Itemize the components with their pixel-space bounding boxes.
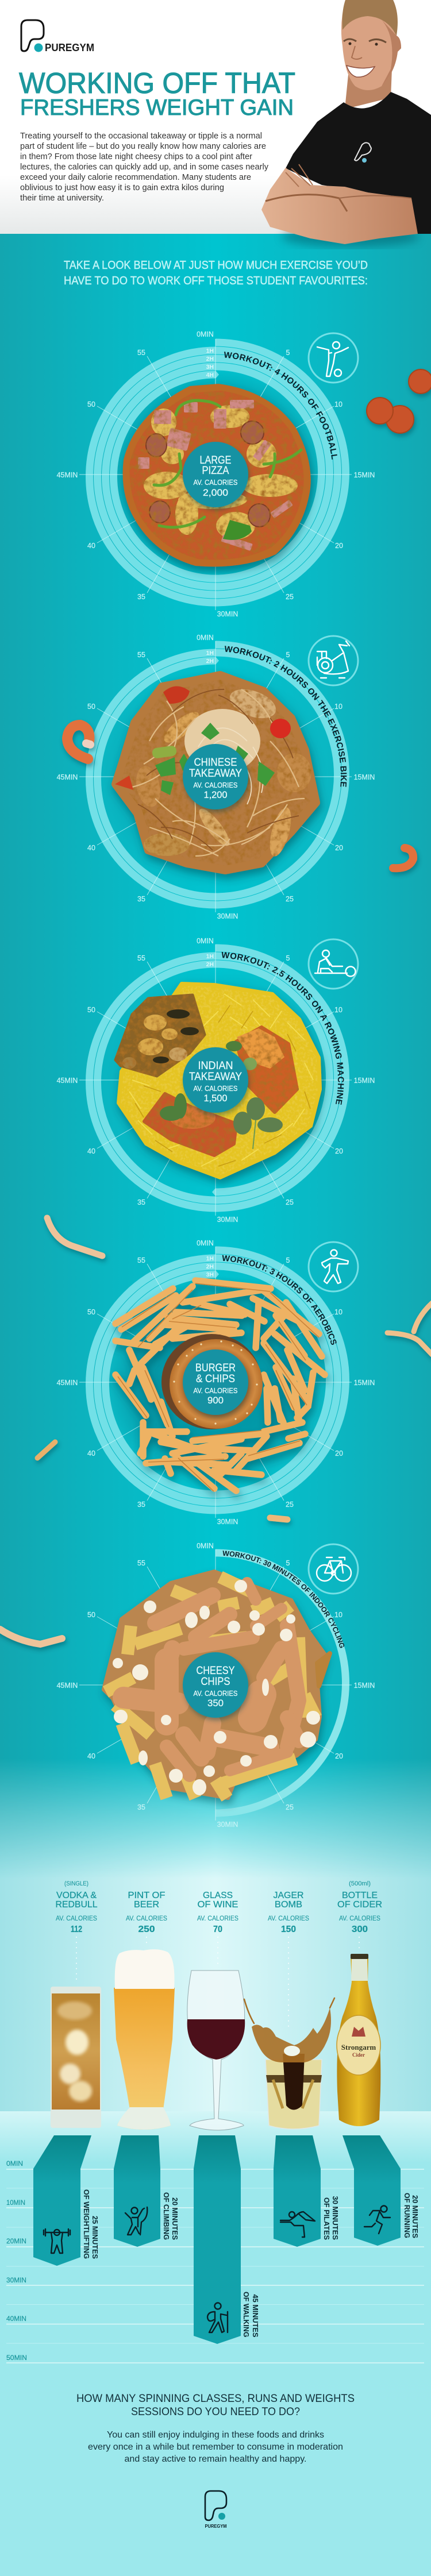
photo: athlete with crossed arms [261,0,431,247]
dial: half hour arc: 50 [87,1611,95,1619]
title: WORKING OFF THAT [19,67,295,99]
dial: half hour arc [57,1542,375,1829]
dial: 2 hours spiral: 10 [334,703,343,711]
drink label: bottle of cider: AV. CALORIES [339,1915,380,1922]
dial: 3 hours spiral: 50 [87,1308,95,1316]
drink label: glass of wine [197,1891,238,1934]
icon: bicycle [309,1544,358,1594]
drink label: vodka and redbull: REDBULL [55,1900,98,1910]
dial: 4 hours spiral: 20 [335,542,343,550]
dial: 2.5 hours spiral: 0MIN [197,937,214,945]
dial: half hour arc: 10 [334,1611,343,1619]
axis labels: 0MIN [6,2159,23,2168]
dial: 3 hours spiral: 15MIN [354,1379,375,1387]
dial: 2.5 hours spiral: 45MIN [57,1077,78,1085]
drink label: jager bomb: JAGER [274,1891,303,1900]
centre badge: cheesy chips: 350 [207,1698,224,1709]
brand logo: PureGym top [21,20,94,53]
dial: half hour arc: 45MIN [57,1682,78,1690]
dial: 3 hours spiral: 10 [334,1308,343,1316]
dial: 2.5 hours spiral: 10 [334,1006,343,1014]
dial: 2 hours spiral: 2H [206,658,214,665]
centre badge: burger and chips [183,1349,248,1415]
intro paragraph [20,132,269,203]
brand logo: PureGym bottom: PUREGYM [205,2524,227,2529]
decoration: stray chips [0,1218,431,1644]
dial: 2 hours spiral: 50 [87,703,95,711]
dial: half hour arc: 25 [286,1803,294,1811]
centre badge: cheesy chips: CHIPS [201,1676,230,1688]
icon: rowing machine [309,939,358,989]
centre badge: chinese takeaway: CHINESE [194,757,237,769]
dial: 2.5 hours spiral: 25 [286,1198,294,1206]
closing heading [76,2393,355,2418]
panel: cheesy chips [56,1542,375,1829]
drink label: vodka and redbull: AV. CALORIES [56,1915,97,1922]
dial: 2.5 hours spiral [57,937,375,1224]
closing paragraph: every once in a while but remember to consume in moderation [88,2442,343,2452]
dial: 2.5 hours spiral: 30MIN [217,1216,238,1224]
intro paragraph: oblivious to just how easy it is to gain extra kilos during [20,183,224,192]
drink: jager bomb [244,1998,334,2129]
icon: exercise bike [309,636,358,685]
dial: half hour arc: 20 [335,1752,343,1760]
subheading [64,259,368,287]
bar: running [343,2135,420,2246]
dial: 3 hours spiral: 0MIN [197,1239,214,1247]
drink label: pint of beer: PINT OF [128,1891,166,1900]
drink label: jager bomb: 150 [281,1925,296,1934]
dial: 2 hours spiral: 20 [335,844,343,852]
food: curry and rice [116,984,320,1178]
dial: 2 hours spiral: 55 [137,651,145,659]
dial: half hour arc: 55 [137,1559,145,1567]
centre badge: chinese takeaway: 1,200 [203,789,228,800]
drink: vodka and redbull glass [51,1987,101,2128]
dial: 3 hours spiral: 30MIN [217,1518,238,1526]
bar: climbing [114,2135,179,2247]
decoration: prawns [67,725,413,868]
centre badge: large pizza: AV. CALORIES [193,479,238,487]
drink label: vodka and redbull [55,1880,98,1934]
dial: half hour arc: 40 [87,1752,95,1760]
centre badge: chinese takeaway: TAKEAWAY [189,768,242,780]
dial: half hour arc: 5 [286,1559,290,1567]
dial: 2.5 hours spiral: 40 [87,1147,95,1155]
drink label: bottle of cider: (500ml) [349,1880,371,1887]
title: FRESHERS WEIGHT GAIN [20,95,294,120]
bar: climbing: OF CLIMBING [162,2192,171,2240]
panel: indian takeaway [56,937,375,1224]
centre badge: large pizza: LARGE [200,454,231,466]
brand logo: PureGym top: PUREGYM [45,42,94,53]
dial: 4 hours spiral: 45MIN [57,471,78,479]
closing paragraph: You can still enjoy indulging in these foods and drinks [107,2430,324,2440]
dial: 4 hours spiral: 35 [137,593,145,601]
centre badge: large pizza: 2,000 [203,487,228,498]
dial: 2.5 hours spiral: 55 [137,954,145,962]
dial: 3 hours spiral: 55 [137,1256,145,1264]
bar: pilates: 30 MINUTES [331,2196,340,2240]
dial: 2.5 hours spiral: 50 [87,1006,95,1014]
drink label: bottle of cider: BOTTLE [342,1891,378,1900]
dial: 3 hours spiral: 1H [206,1255,214,1262]
dial: 3 hours spiral: 2H [206,1263,214,1270]
subheading: TAKE A LOOK BELOW AT JUST HOW MUCH EXERCISE YOU’D [64,259,368,272]
dial: 2 hours spiral: 0MIN [197,634,214,642]
centre badge: cheesy chips: AV. CALORIES [193,1690,238,1698]
drink label: glass of wine: AV. CALORIES [197,1915,238,1922]
dial: 4 hours spiral: 40 [87,542,95,550]
drink: bottle of cider: Cider [352,2052,365,2058]
workout label: indoor cycling: WORKOUT: 30 MINUTES OF INDOOR CYCLING [223,1551,345,1648]
drink label: vodka and redbull: VODKA & [56,1891,97,1900]
axis labels: 20MIN [6,2237,26,2245]
axis labels: 50MIN [6,2354,27,2362]
intro paragraph: exceed your daily calorie recommendation. Many students are [20,173,251,182]
centre badge: indian takeaway: 1,500 [203,1093,228,1104]
drink label: pint of beer: 250 [138,1925,155,1934]
dial: 2.5 hours spiral: 20 [335,1147,343,1155]
drink label: glass of wine: 70 [213,1925,222,1934]
dial: 2.5 hours spiral: 35 [137,1198,145,1206]
bar: pilates [274,2135,340,2247]
dial: 2.5 hours spiral: 1H [206,953,214,960]
drink label: vodka and redbull: (SINGLE) [64,1880,88,1887]
bar: running: 20 MINUTES [411,2195,420,2238]
grid lines [6,2169,424,2363]
dotted leader lines [76,1937,359,2028]
drink label: pint of beer: BEER [134,1900,159,1910]
drink label: bottle of cider: OF CIDER [337,1900,382,1910]
dial: 3 hours spiral: 5 [286,1256,290,1264]
dial: 4 hours spiral: 15MIN [354,471,375,479]
dial: 2.5 hours spiral: 5 [286,954,290,962]
drink: bottle of cider: Strongarm [341,2043,376,2051]
dial: 4 hours spiral: 3H [206,364,214,371]
axis labels [6,2159,27,2362]
decoration: pepperoni slices [367,369,431,433]
dial: 3 hours spiral: 40 [87,1449,95,1457]
closing paragraph: and stay active to remain healthy and happy. [124,2454,307,2464]
intro paragraph: part of student life – but do you really know how many calories are [20,142,266,151]
closing paragraph [88,2430,343,2464]
food: noodles [115,675,316,870]
dial: 2 hours spiral: 45MIN [57,773,78,781]
dial: 2 hours spiral: 40 [87,844,95,852]
bar: pilates: OF PILATES [322,2197,331,2240]
intro paragraph: Treating yourself to the occasional takeaway or tipple is a normal [20,132,262,141]
workout label: rowing machine: WORKOUT: 2.5 HOURS ON A ROWING MACHINE [222,951,344,1105]
intro paragraph: in them? From those late night cheesy chips to a cool pint after [20,152,252,161]
closing heading: HOW MANY SPINNING CLASSES, RUNS AND WEIGHTS [76,2393,355,2405]
centre badge: chinese takeaway [183,744,248,809]
dial: 3 hours spiral: 20 [335,1449,343,1457]
dial: 4 hours spiral: 4H [206,372,214,379]
bar: running: OF RUNNING [403,2193,411,2238]
drink label: jager bomb: BOMB [275,1900,302,1910]
bar: walking [194,2135,260,2344]
bar chart: exercise minutes [6,2135,424,2363]
dial: 2.5 hours spiral: 2H [206,961,214,968]
icon: aerobics [309,1242,358,1291]
centre badge: chinese takeaway: AV. CALORIES [193,781,238,789]
dial: half hour arc: 0MIN [197,1542,214,1550]
dial: half hour arc: 30MIN [217,1821,238,1829]
food: pizza [123,384,311,566]
title [19,67,295,120]
dial: 4 hours spiral: 10 [334,400,343,408]
centre badge: indian takeaway: INDIAN [198,1060,233,1072]
bar: walking: OF WALKING [242,2292,251,2337]
centre badge: burger and chips: 900 [207,1395,224,1406]
dial: 2.5 hours spiral: 15MIN [354,1077,375,1085]
centre badge: cheesy chips [183,1652,248,1718]
centre badge: indian takeaway [183,1047,248,1113]
food: cheesy chips [103,1571,330,1798]
centre badge: cheesy chips: CHEESY [197,1665,235,1677]
dial: 4 hours spiral: 30MIN [217,610,238,618]
dial: 4 hours spiral: 55 [137,349,145,357]
workout label: aerobics: WORKOUT: 3 HOURS OF AEROBICS [222,1255,337,1345]
dial: 3 hours spiral: 25 [286,1501,294,1509]
axis labels: 40MIN [6,2315,26,2323]
intro paragraph: their time at university. [20,194,104,203]
dial: 3 hours spiral: 45MIN [57,1379,78,1387]
dial: 2 hours spiral: 35 [137,895,145,903]
dial: 4 hours spiral: 50 [87,400,95,408]
drink: glass of wine [187,1970,245,2130]
bar: climbing: 20 MINUTES [171,2197,179,2240]
panel: chinese takeaway [56,634,375,920]
food: burger and chips [116,1281,325,1491]
centre badge: indian takeaway: TAKEAWAY [189,1071,242,1083]
workout label: football: WORKOUT: 4 HOURS OF FOOTBALL [224,352,337,460]
drink label: glass of wine: OF WINE [198,1900,238,1910]
dial: 2 hours spiral: 1H [206,650,214,657]
axis labels: 30MIN [6,2276,26,2284]
dial: half hour arc: 15MIN [354,1682,375,1690]
bar: weightlifting: 25 MINUTES [91,2216,99,2259]
bar: weightlifting: OF WEIGHTLIFTING [82,2189,91,2259]
centre badge: burger and chips: BURGER [195,1362,236,1374]
dial: 3 hours spiral: 35 [137,1501,145,1509]
centre badge: large pizza [183,442,248,507]
bar: weightlifting [33,2135,99,2266]
subheading: HAVE TO DO TO WORK OFF THOSE STUDENT FAVOURITES: [64,275,368,287]
brand logo: PureGym bottom [205,2491,227,2529]
dial: 2 hours spiral: 15MIN [354,773,375,781]
dial: 3 hours spiral [57,1239,375,1526]
closing heading: SESSIONS DO YOU NEED TO DO? [131,2406,300,2418]
dial: 2 hours spiral: 30MIN [217,912,238,920]
centre badge: burger and chips: & CHIPS [196,1373,235,1385]
dial: 2 hours spiral [57,634,375,920]
dial: 3 hours spiral: 3H [206,1271,214,1278]
bar: walking: 45 MINUTES [251,2295,260,2338]
drink label: pint of beer [126,1891,167,1934]
centre badge: indian takeaway: AV. CALORIES [193,1085,238,1093]
dial: half hour arc: 35 [137,1803,145,1811]
dial: 4 hours spiral [57,330,375,618]
drink: bottle of cider [337,1954,380,2126]
panel: burger and chips [56,1239,375,1526]
drink label: pint of beer: AV. CALORIES [126,1915,167,1922]
centre badge: large pizza: PIZZA [202,465,229,477]
intro paragraph: lectures, the calories can quickly add up, and in some cases nearly [20,163,269,172]
drink label: bottle of cider [337,1880,382,1934]
axis labels: 10MIN [6,2199,25,2207]
drink label: jager bomb [268,1891,309,1934]
workout label: exercise bike: WORKOUT: 2 HOURS ON THE EXERCISE BIKE [225,646,347,787]
dial: 4 hours spiral: 5 [286,349,290,357]
icon: football [309,333,358,383]
dial: 4 hours spiral: 1H [206,348,214,354]
dial: 4 hours spiral: 2H [206,356,214,363]
drink label: bottle of cider: 300 [352,1925,368,1934]
drink label: glass of wine: GLASS [203,1891,233,1900]
drink: pint of beer [114,1949,175,2130]
dial: 4 hours spiral: 0MIN [197,330,214,338]
dial: 4 hours spiral: 25 [286,593,294,601]
centre badge: burger and chips: AV. CALORIES [193,1387,238,1395]
drink label: jager bomb: AV. CALORIES [268,1915,309,1922]
dial: 2 hours spiral: 5 [286,651,290,659]
drink label: vodka and redbull: 112 [71,1925,82,1934]
dial: 2 hours spiral: 25 [286,895,294,903]
panel: large pizza [56,330,375,618]
